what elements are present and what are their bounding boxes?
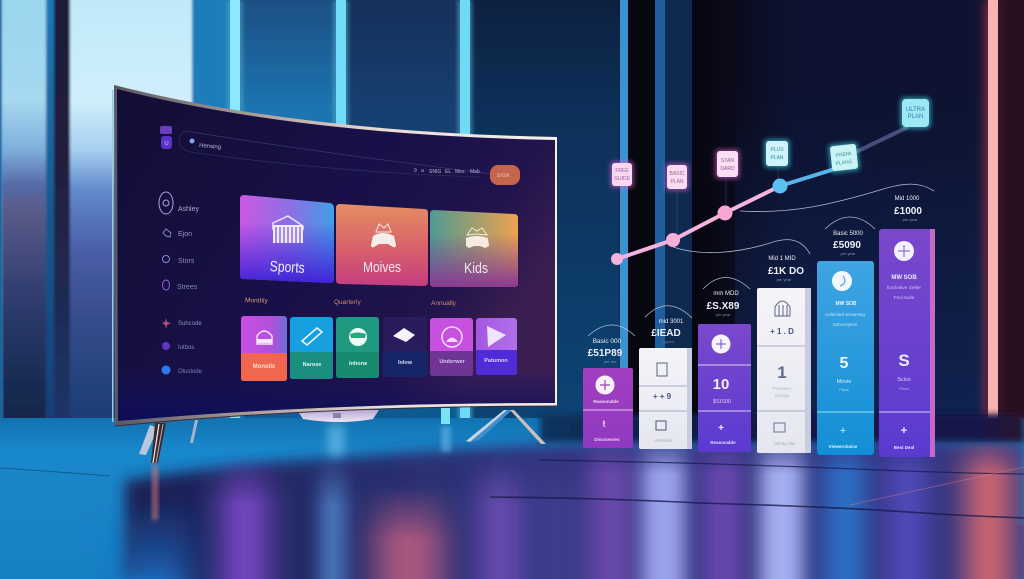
glowing tag: point 6: PLAN	[908, 114, 923, 120]
content tile 4	[383, 317, 427, 377]
header nav and button: EL	[445, 169, 451, 175]
content tile 6	[476, 318, 517, 375]
pricing bar 1: Reasonable	[593, 399, 619, 404]
icon: columns	[775, 301, 790, 316]
glowing tag: point 1	[610, 161, 634, 188]
sidebar menu: Strees	[177, 284, 198, 291]
price label	[768, 256, 804, 282]
tv bezel	[114, 85, 557, 426]
price label	[894, 196, 922, 222]
price label: per year	[903, 217, 918, 222]
price label: Mid 1 MID	[768, 256, 796, 262]
trend line chart	[610, 97, 931, 265]
price label: Tipped	[662, 339, 674, 344]
sidebar menu: Stors	[178, 258, 195, 265]
category card: movies	[336, 204, 428, 286]
content tile 5: Underwer	[439, 359, 466, 365]
glowing tag: point 1: GUIDE	[614, 176, 631, 182]
icon	[712, 334, 730, 354]
price label: Mid 1000	[895, 196, 920, 202]
pricing bar 6: Plans	[899, 387, 909, 391]
pricing bar 4	[757, 256, 811, 453]
pricing bar 5: Subscription	[833, 322, 858, 327]
header nav and button: SIGN	[497, 173, 509, 179]
header nav and button	[414, 165, 520, 185]
plan tab labels	[245, 297, 457, 307]
content tile 6: Patumon	[484, 358, 508, 364]
content tile 2	[290, 317, 333, 379]
price label	[707, 291, 740, 317]
pricing bar 3: Reasonable	[710, 440, 736, 445]
content tile 5	[430, 318, 473, 376]
glowing tag: point 4: PLAN	[770, 155, 784, 161]
category card: sports: Sports	[269, 258, 305, 277]
category card: sports	[240, 195, 334, 283]
pricing bar 4: + 1 . D	[770, 327, 794, 336]
pricing arcs	[588, 184, 934, 336]
pricing bar 6: Exclusive Seller	[887, 285, 921, 291]
price label	[651, 319, 684, 344]
price label	[833, 231, 864, 256]
price label: per year	[716, 312, 731, 317]
price label: Basic 5000	[833, 231, 864, 237]
pricing bar 3: 10	[713, 376, 729, 393]
category card: kids: Kids	[464, 260, 488, 277]
price label: £1K DO	[768, 266, 804, 277]
pricing bar 6: S	[898, 351, 910, 370]
content tile 4: Inlow	[398, 360, 413, 366]
sidebar menu: Ashley	[178, 206, 200, 213]
content tile 1	[241, 316, 287, 381]
pricing bar 6: MW SOB	[891, 275, 917, 281]
glowing tag: point 5: PLANS	[835, 159, 853, 167]
price label: mm MDD	[713, 291, 739, 297]
tv stand: centre base	[297, 408, 450, 424]
pricing bar 4: Premium	[773, 386, 791, 391]
icon: stadium	[273, 216, 303, 243]
pricing bar 1: Discoveries	[594, 437, 620, 442]
tv stand: left legs	[139, 420, 198, 463]
tv stand: right legs	[466, 410, 546, 444]
sidebar menu: Iotbos	[178, 345, 194, 351]
content tile 3	[336, 317, 379, 378]
pricing bar 2: Unlimited	[654, 438, 673, 443]
header nav and button: 9 a	[414, 168, 424, 174]
background: studio wall with neon light columns	[0, 0, 1024, 445]
glowing tag: point 6: ULTRA	[906, 107, 925, 113]
curved television	[112, 85, 557, 426]
pricing bar 3: $SIS00	[713, 399, 731, 405]
pricing bar 5	[817, 231, 874, 455]
glowing tag: point 4: PLUS	[770, 147, 784, 153]
glowing tag: point 1: FREE	[615, 168, 629, 174]
price label	[588, 338, 623, 364]
pricing bar 5: 5	[840, 355, 849, 372]
pricing bar 4: listings	[775, 393, 790, 398]
logo badge	[160, 126, 172, 149]
data nodes	[611, 178, 788, 265]
price label: £S.X89	[707, 301, 740, 312]
glowing tag: point 2: BASIC	[669, 171, 685, 177]
icon	[657, 363, 667, 376]
pricing bar 6: Pool Suite	[894, 295, 915, 300]
content tile 1: Monstic	[253, 364, 276, 370]
content tile 3: Inhorw	[349, 361, 368, 367]
price label: per year	[777, 277, 792, 282]
pricing bar 1	[583, 338, 633, 448]
pricing bar 6: +	[901, 425, 907, 437]
pricing bar 1: ŧ	[603, 419, 606, 430]
pricing bar 5: MW SOB	[835, 301, 857, 307]
icon	[596, 376, 614, 394]
glowing tag: point 4	[764, 139, 790, 168]
icon	[894, 241, 914, 261]
tv screen	[117, 89, 555, 421]
trend line	[617, 186, 780, 259]
icon: game controller	[371, 224, 396, 247]
icon	[832, 271, 852, 291]
plan tab labels: Annually	[431, 300, 457, 307]
price label: per year	[841, 251, 856, 256]
search bar	[180, 131, 500, 177]
pricing bar 3: +	[718, 423, 724, 434]
plan tab labels: Quarterly	[334, 299, 361, 306]
pricing bar 5: Movie	[837, 379, 851, 385]
plan tab labels: Monthly	[245, 297, 269, 305]
category card: movies: Moives	[363, 259, 401, 276]
price label: Basic 000	[593, 338, 622, 345]
header nav and button: Mab	[470, 169, 480, 175]
glowing tag: point 3: DARD	[720, 166, 735, 172]
price label: £IEAD	[651, 328, 681, 339]
category card: kids	[430, 210, 518, 287]
pricing bar 5: +	[840, 425, 846, 437]
pricing bar 5: Plans	[839, 388, 849, 392]
floor with coloured reflections	[0, 418, 1024, 579]
pricing bar 6: Sclos	[897, 377, 911, 383]
glowing tag: point 5	[828, 142, 860, 173]
pricing bar 4: family plan	[774, 441, 796, 446]
glowing tag: point 3	[715, 149, 740, 179]
price label: £1000	[894, 206, 922, 217]
glowing tag: point 6	[900, 97, 931, 129]
edge glow	[112, 90, 114, 422]
floor join behind bars	[540, 414, 1024, 442]
pricing bar 5: Viewerchoice	[829, 444, 858, 449]
pricing bar 5: Unlimited streaming	[825, 312, 865, 317]
logo badge: U	[164, 141, 169, 147]
pricing bar 6: Best Deal	[894, 445, 914, 450]
sidebar menu: Ejon	[178, 231, 192, 238]
pricing bar 6	[879, 196, 935, 457]
search bar: Hensing	[199, 143, 221, 151]
price label: £51P89	[588, 348, 623, 359]
pricing bar 4: 1	[777, 363, 787, 382]
leader stems	[622, 166, 778, 258]
pricing bar 2: + + 9	[653, 392, 672, 401]
icon: toy controller	[466, 228, 489, 248]
content tile 2: Narose	[303, 362, 321, 368]
glowing tag: point 2	[665, 163, 689, 191]
glowing tag: point 5: PREMI	[835, 151, 852, 159]
price label: £5090	[833, 240, 861, 251]
sidebar menu	[159, 192, 203, 375]
header nav and button: Mes	[455, 169, 465, 175]
glowing tag: point 3: STAN	[721, 158, 734, 164]
glowing tag: point 2: PLAN	[670, 179, 684, 185]
pricing bar 3	[698, 291, 751, 452]
sidebar menu: Suhcode	[178, 321, 202, 327]
header nav and button: SNIG	[429, 169, 441, 175]
sidebar menu: Olustode	[178, 369, 203, 375]
price label: per mo	[604, 359, 617, 364]
price label: mid 3001	[659, 319, 684, 325]
pricing bar 2	[639, 319, 692, 449]
